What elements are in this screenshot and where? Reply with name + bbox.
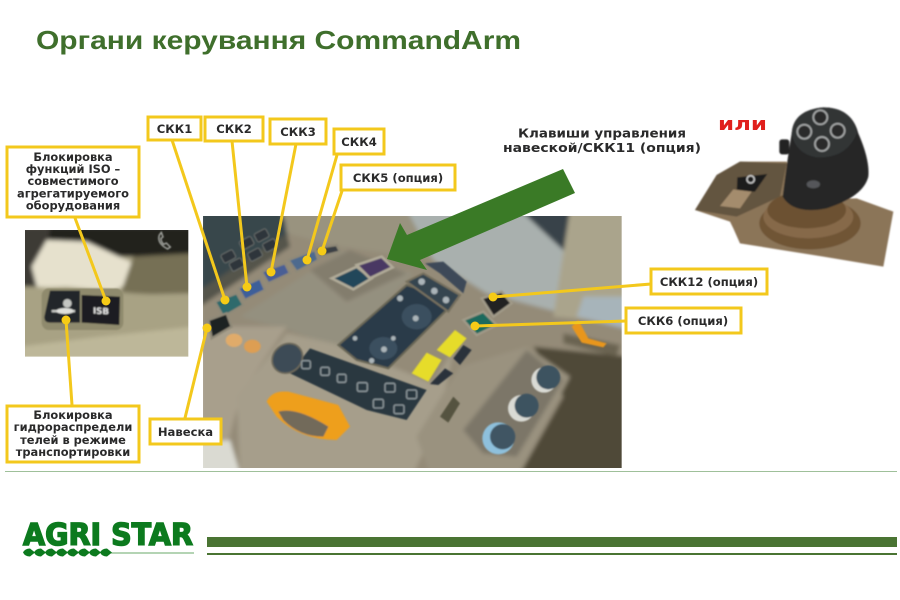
yellow levers [430,368,453,385]
arrow: green arrow to hitch keys [387,169,575,270]
callout: hydraulic valve lock [7,316,139,462]
central dark keypad [338,285,457,368]
callout: СКК2 [205,117,263,292]
callout: СКК5 [318,165,455,256]
callout: ISO lock [7,147,139,306]
callout: СКК4: СКК4 [341,135,377,149]
footer divider [5,471,897,472]
lower key strip [290,348,427,420]
text: hitch control keys caption: Клавиши управления [518,126,686,140]
callout: СКК6 [470,308,741,333]
callout: СКК1: СКК1 [157,122,192,136]
photo: CommandArm control panel [200,210,630,473]
photo: ISB lock buttons: ISB [93,307,109,317]
text: hitch control keys caption: навеской/СКК11 (опция) [503,140,701,155]
callout: СКК2: СКК2 [216,122,252,136]
callout: Навеска [150,324,221,444]
callout: СКК5: СКК5 (опция) [353,171,443,185]
orange indicator buttons [226,334,242,347]
callout: ISO lock: Блокировка [33,150,113,164]
callout: ISO lock: совместимого [27,174,119,188]
callout: hydraulic valve lock: Блокировка [33,408,113,422]
footer bars [207,537,897,555]
title: Органи керування CommandArm [36,25,521,55]
callout: ISO lock: агрегатируемого [17,186,129,200]
callout: hydraulic valve lock: телей в режиме [20,433,126,447]
callout: СКК1 [148,117,230,304]
callout: СКК6: СКК6 (опция) [638,314,728,328]
callout: Навеска: Навеска [158,425,213,439]
callout: СКК3: СКК3 [280,125,316,139]
orange hand throttle [267,391,350,440]
callout: СКК12: СКК12 (опция) [660,275,758,289]
callout: ISO lock: оборудования [26,198,120,212]
photo: ISB lock buttons [25,230,188,357]
callout: hydraulic valve lock: гидрораспредели [14,420,132,434]
callout: СКК4 [302,129,384,264]
callout: СКК12 [488,269,767,302]
callout: СКК3 [266,119,326,276]
dial [425,262,467,293]
callout: ISO lock: функций ISO – [26,162,121,176]
icon: joystick alternative [695,107,893,267]
small switches [208,245,340,338]
callout: hydraulic valve lock: транспортировки [16,445,130,459]
logo: AGRI STAR: AGRI STAR [23,518,193,553]
label: или: или [718,114,767,135]
text: hitch control keys caption [503,126,701,155]
upper console keys [220,228,278,272]
knobs [531,367,557,393]
